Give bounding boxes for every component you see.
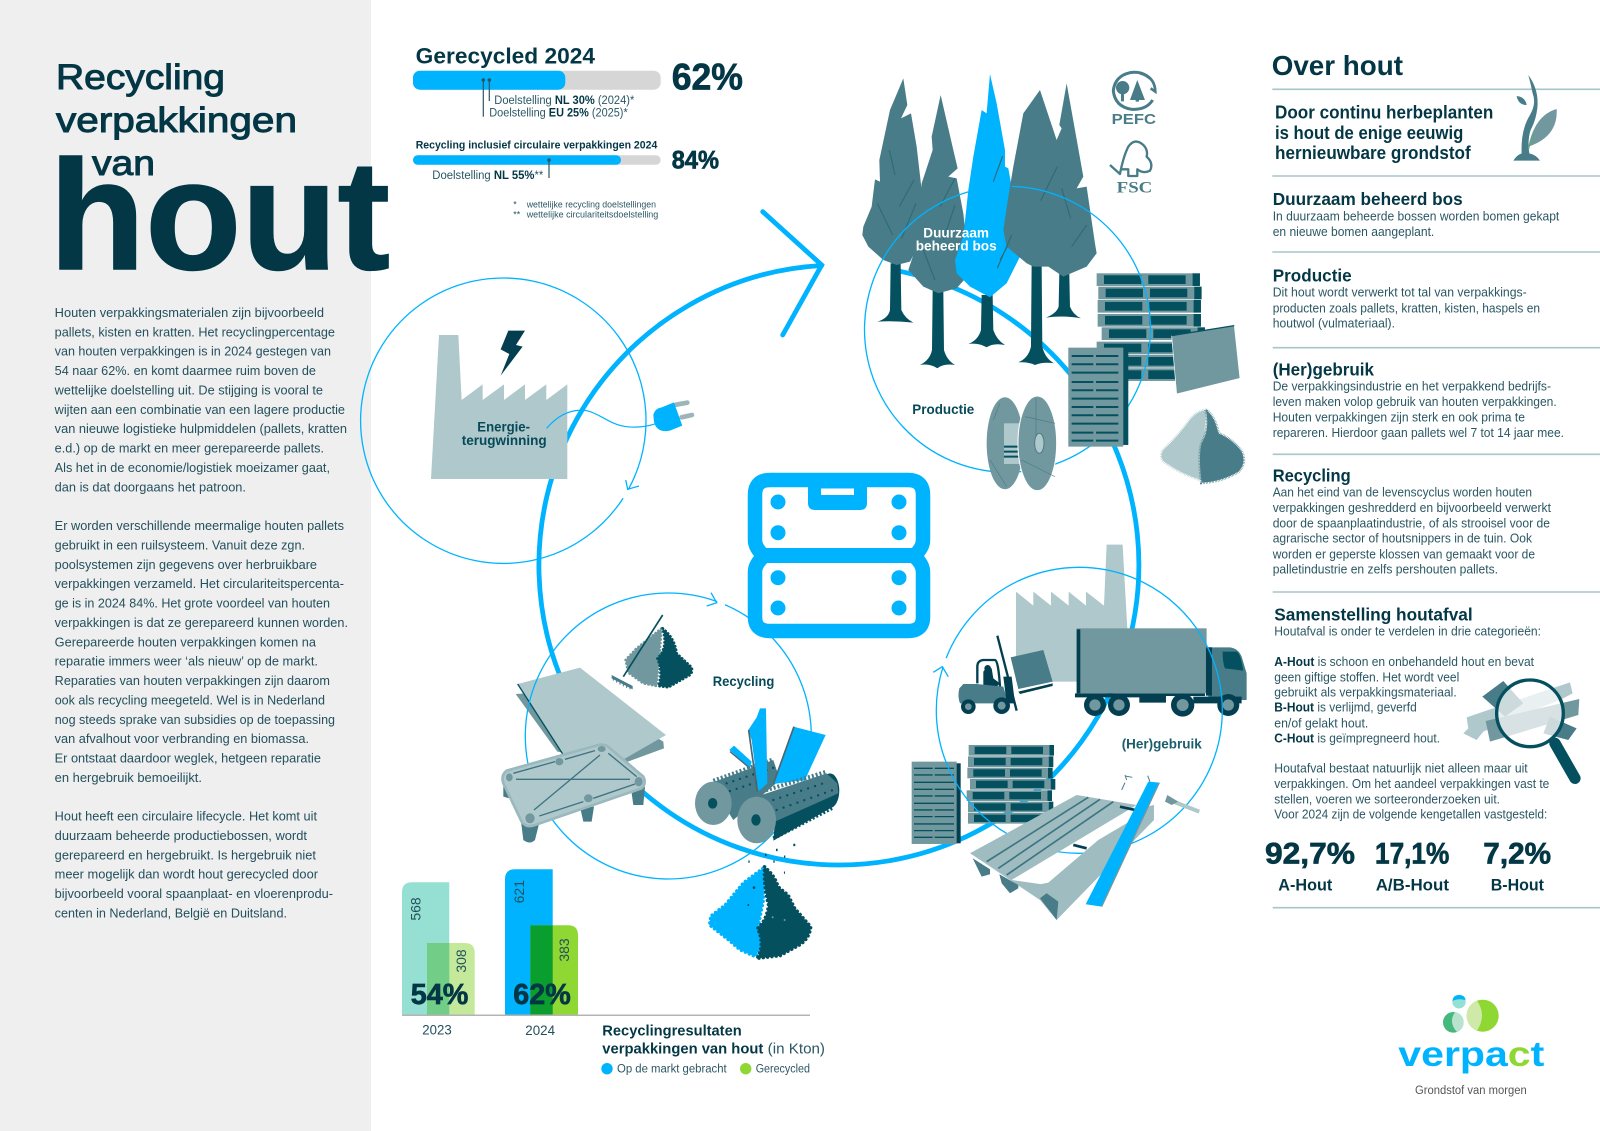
section: recycling: Aan het eind van de levenscyclus worden houten bbox=[1273, 485, 1532, 500]
section: samenstelling houtafval: Houtafval bestaat natuurlijk niet alleen maar uit bbox=[1274, 761, 1528, 776]
logo: verpact bbox=[1398, 995, 1545, 1097]
intro text block: ge is in 2024 84%. Het grote voordeel van houten bbox=[55, 596, 330, 610]
key figures: A/B-Hout bbox=[1376, 876, 1449, 895]
circle arrow: energie bbox=[306, 223, 701, 618]
icon: plug bbox=[547, 402, 692, 431]
section: recycling: verpakkingen geshredderd en bijvoorbeeld verwerkt bbox=[1273, 500, 1551, 515]
intro text block: poolsystemen zijn gegevens over herbruikbare bbox=[55, 558, 317, 572]
progress: gerecycled 2024 bbox=[413, 43, 743, 120]
illustration: front pallet stack bbox=[1068, 348, 1128, 447]
illustration: forest bbox=[862, 74, 1097, 368]
intro text block: van nieuwe logistieke hulpmiddelen (pallets, kratten bbox=[55, 422, 347, 436]
illustration: shredder bbox=[695, 708, 839, 873]
key figures: 92,7% bbox=[1265, 837, 1355, 870]
icon: central pallet bbox=[755, 478, 923, 631]
key figures: B-Hout bbox=[1491, 876, 1544, 895]
label: energieterugwinning: Energie- bbox=[477, 419, 530, 435]
intro text block: e.d.) op de markt en meer gerepareerde pallets. bbox=[55, 442, 324, 456]
intro text block: Reparaties van houten verpakkingen zijn daarom bbox=[55, 674, 330, 688]
label: duurzaam beheerd bos: Duurzaam bbox=[923, 224, 989, 240]
bar chart: recycling results: 2024 bbox=[525, 1022, 555, 1038]
section: samenstelling houtafval: gebruikt als verpakkingsmateriaal. bbox=[1274, 685, 1457, 700]
section: recycling: agrarische sector of houtsnippers in de tuin. Ook bbox=[1273, 531, 1533, 546]
logo: verpact: Grondstof van morgen bbox=[1415, 1085, 1527, 1097]
progress: recycling inclusief circulaire verpakkingen: Doelstelling NL 55%** bbox=[432, 170, 544, 182]
chart title and legend: Recyclingresultaten bbox=[602, 1023, 742, 1040]
section: duurzaam beheerd bos: Duurzaam beheerd bos bbox=[1273, 189, 1463, 209]
illustration: repaired pallet, plank and hammer bbox=[970, 775, 1199, 920]
illustration: pressed wood pallet bbox=[503, 745, 645, 842]
section: samenstelling houtafval: en/of gelakt hout. bbox=[1274, 715, 1368, 730]
intro text block: gerepareerd en hergebruikt. Is hergebruik niet bbox=[55, 848, 317, 862]
heading: over hout: Over hout bbox=[1272, 50, 1403, 81]
bar chart: recycling results: 54% bbox=[411, 979, 469, 1011]
intro text block: centen in Nederland, België en Duitsland. bbox=[55, 906, 287, 920]
section: samenstelling houtafval: B-Hout is verlijmd, geverfd bbox=[1274, 700, 1417, 715]
section: hergebruik bbox=[1273, 360, 1564, 440]
label: productie: Productie bbox=[912, 401, 974, 417]
label: duurzaam beheerd bos bbox=[916, 224, 997, 254]
progress: gerecycled 2024: Doelstelling NL 30% (2024)* bbox=[494, 95, 635, 107]
key message: is hout de enige eeuwig bbox=[1275, 123, 1463, 143]
key figures: 7,2% bbox=[1483, 837, 1551, 870]
circle arrow: hergebruik bbox=[894, 525, 1265, 896]
intro text block: Houten verpakkingsmaterialen zijn bijvoorbeeld bbox=[55, 306, 324, 320]
intro text block: ook als recycling meegeteld. Wel is in Nederland bbox=[55, 693, 325, 707]
section: samenstelling houtafval: verpakkingen. Om het aandeel verpakkingen vast te bbox=[1274, 776, 1549, 791]
progress: recycling inclusief circulaire verpakkingen bbox=[413, 140, 719, 182]
illustration: pallet stack and board bbox=[1097, 273, 1240, 394]
footnotes bbox=[513, 200, 658, 219]
progress: recycling inclusief circulaire verpakkingen: Recycling inclusief circulaire verpakkingen 2024 bbox=[416, 140, 658, 152]
icon: energy factory bbox=[431, 331, 567, 479]
intro text block: van afvalhout voor verbranding en biomassa. bbox=[55, 732, 309, 746]
intro text block: Hout heeft een circulaire lifecycle. Het komt uit bbox=[55, 810, 318, 824]
intro text block: verpakkingen is dat ze gerepareerd kunnen worden. bbox=[55, 616, 348, 630]
intro text block: meer mogelijk dan wordt hout gerecycled door bbox=[55, 868, 318, 882]
section: duurzaam beheerd bos: en nieuwe bomen aangeplant. bbox=[1273, 224, 1434, 239]
main title: hout bbox=[49, 129, 390, 303]
icon: magnifier over wood bbox=[1463, 680, 1579, 778]
chart title and legend: Op de markt gebracht bbox=[617, 1063, 727, 1075]
main title: verpakkingen bbox=[56, 101, 297, 140]
intro text block: bijvoorbeeld vooral spaanplaat- en vloerenprodu- bbox=[55, 887, 333, 901]
illustration: wood chip pile bbox=[709, 867, 811, 959]
icon: sprout bbox=[1513, 75, 1557, 161]
illustration: rake and sawdust pile bbox=[612, 615, 692, 689]
intro text block: nog steeds sprake van subsidies op de toepassing bbox=[55, 713, 335, 727]
progress: recycling inclusief circulaire verpakkingen: 84% bbox=[672, 146, 719, 174]
section: productie: producten zoals pallets, kratten, kisten, haspels en bbox=[1273, 300, 1540, 315]
main title: Recycling bbox=[56, 58, 225, 97]
section: samenstelling houtafval: A-Hout is schoon en onbehandeld hout en bevat bbox=[1274, 654, 1534, 669]
bar chart: recycling results: 308 bbox=[453, 949, 469, 973]
intro text block: wijten aan een combinatie van een lagere productie bbox=[54, 403, 345, 417]
intro text block: Er worden verschillende meermalige houten pallets bbox=[55, 519, 344, 533]
key figures: 17,1% bbox=[1375, 837, 1449, 870]
intro text block: gebruikt in een ruilsysteem. Vanuit deze zgn. bbox=[55, 538, 305, 552]
label: recycling: Recycling bbox=[713, 673, 774, 689]
label: energieterugwinning: terugwinning bbox=[462, 432, 547, 448]
intro text block: Als het in de economie/logistiek moeizamer gaat, bbox=[55, 461, 330, 475]
illustration: reuse pallet stacks bbox=[912, 745, 1055, 844]
main title: van bbox=[92, 144, 155, 183]
progress: gerecycled 2024: Doelstelling EU 25% (2025)* bbox=[489, 108, 628, 120]
bar chart: recycling results: 383 bbox=[556, 938, 572, 962]
section: recycling: palletindustrie en zelfs pershouten pallets. bbox=[1273, 561, 1498, 576]
bar chart: recycling results: 568 bbox=[408, 897, 424, 921]
key figures bbox=[1265, 837, 1551, 895]
progress: gerecycled 2024: Gerecycled 2024 bbox=[416, 43, 596, 68]
section: samenstelling houtafval: Samenstelling houtafval bbox=[1274, 605, 1473, 625]
intro text block: duurzaam beheerde productiebossen, wordt bbox=[55, 829, 308, 843]
section: hergebruik: (Her)gebruik bbox=[1273, 360, 1374, 380]
footnotes: wettelijke circulariteitsdoelstelling bbox=[526, 209, 658, 219]
illustration: factory, truck and forklift bbox=[958, 545, 1247, 717]
section: recycling: Recycling bbox=[1273, 466, 1351, 486]
intro text block: 54 naar 62%. en komt daarmee ruim boven de bbox=[55, 364, 316, 378]
chart title and legend: Gerecycled bbox=[756, 1063, 810, 1075]
intro text block bbox=[54, 306, 348, 920]
intro text block: en hergebruik bemoeilijkt. bbox=[55, 771, 202, 785]
circle arrow: bos bbox=[860, 182, 1155, 476]
section: samenstelling houtafval: Voor 2024 zijn de volgende kengetallen vastgesteld: bbox=[1274, 806, 1547, 821]
section: duurzaam beheerd bos: In duurzaam beheerde bossen worden bomen gekapt bbox=[1273, 209, 1560, 224]
label: hergebruik: (Her)gebruik bbox=[1122, 735, 1202, 751]
section: samenstelling houtafval bbox=[1274, 605, 1549, 821]
logo: PEFC bbox=[1112, 72, 1157, 128]
intro text block: van houten verpakkingen is in 2024 gestegen van bbox=[55, 345, 331, 359]
logo: PEFC: PEFC bbox=[1112, 112, 1157, 128]
section: productie bbox=[1273, 266, 1540, 331]
bar chart: recycling results bbox=[402, 869, 810, 1038]
section: productie: Dit hout wordt verwerkt tot tal van verpakkings- bbox=[1273, 285, 1527, 300]
logo: verpact: verp act bbox=[1398, 1035, 1545, 1074]
section: samenstelling houtafval: C-Hout is geïmpregneerd hout. bbox=[1274, 730, 1440, 745]
logo: FSC: FSC bbox=[1117, 180, 1152, 197]
section: samenstelling houtafval: stellen, voeren we sorteeronderzoeken uit. bbox=[1274, 791, 1500, 806]
label: duurzaam beheerd bos: beheerd bos bbox=[916, 238, 997, 254]
chart title and legend: verpakkingen van hout bbox=[602, 1040, 763, 1057]
intro text block: Er ontstaat daardoor weglek, hetgeen reparatie bbox=[55, 752, 321, 766]
section: recycling: worden er geperste klossen van gemaakt voor de bbox=[1272, 546, 1535, 561]
illustration: cable reel bbox=[987, 396, 1057, 491]
section: hergebruik: leven maken volop gebruik van houten verpakkingen. bbox=[1273, 394, 1557, 409]
bar chart: recycling results: 62% bbox=[513, 979, 571, 1011]
intro text block: verpakkingen verzameld. Het circulariteitspercenta- bbox=[55, 577, 344, 591]
key figures: A-Hout bbox=[1278, 876, 1333, 895]
key message bbox=[1275, 102, 1493, 163]
sidebar background bbox=[0, 0, 371, 1131]
section: hergebruik: Houten verpakkingen zijn sterk en ook prima te bbox=[1273, 410, 1525, 425]
chart title and legend bbox=[601, 1023, 825, 1075]
section: recycling: door de spaanplaatindustrie, of als strooisel voor de bbox=[1273, 515, 1550, 530]
section: samenstelling houtafval: geen giftige stoffen. Het wordt veel bbox=[1274, 670, 1459, 685]
section: duurzaam beheerd bos bbox=[1273, 189, 1560, 239]
footnotes: ** bbox=[513, 209, 521, 219]
arrow: main lifecycle circle bbox=[539, 212, 1139, 865]
circle arrow: recycling bbox=[480, 548, 856, 924]
bar chart: recycling results: 621 bbox=[511, 880, 527, 903]
section: recycling bbox=[1272, 466, 1551, 576]
intro text block: pallets, kisten en kratten. Het recyclingpercentage bbox=[55, 325, 335, 339]
key message: hernieuwbare grondstof bbox=[1275, 143, 1472, 163]
key message: Door continu herbeplanten bbox=[1275, 102, 1493, 122]
intro text block: reparatie immers weer ‘als nieuw’ op de markt. bbox=[55, 655, 318, 669]
section: samenstelling houtafval: Houtafval is onder te verdelen in drie categorieën: bbox=[1274, 624, 1541, 639]
section rules bbox=[1272, 89, 1600, 908]
progress: gerecycled 2024: 62% bbox=[672, 56, 743, 97]
chart title and legend: (in Kton) bbox=[768, 1040, 825, 1057]
illustration: wood wool pile bbox=[1161, 410, 1243, 483]
illustration: chipboard plates bbox=[516, 668, 666, 763]
section: productie: houtwol (vulmateriaal). bbox=[1273, 316, 1395, 331]
section: hergebruik: De verpakkingsindustrie en het verpakkend bedrijfs- bbox=[1273, 379, 1551, 394]
logo: FSC bbox=[1110, 142, 1152, 197]
intro text block: dan is dat doorgaans het patroon. bbox=[55, 480, 246, 494]
section: hergebruik: repareren. Hierdoor gaan pallets wel 7 tot 14 jaar mee. bbox=[1273, 425, 1564, 440]
bar chart: recycling results: 2023 bbox=[422, 1021, 452, 1037]
label: energieterugwinning bbox=[462, 419, 547, 448]
intro text block: wettelijke doelstelling uit. De stijging is vooral te bbox=[54, 384, 323, 398]
footnotes: wettelijke recycling doelstellingen bbox=[526, 200, 656, 210]
intro text block: Gerepareerde houten verpakkingen komen na bbox=[55, 635, 316, 649]
section: productie: Productie bbox=[1273, 266, 1352, 286]
footnotes: * bbox=[513, 200, 517, 210]
